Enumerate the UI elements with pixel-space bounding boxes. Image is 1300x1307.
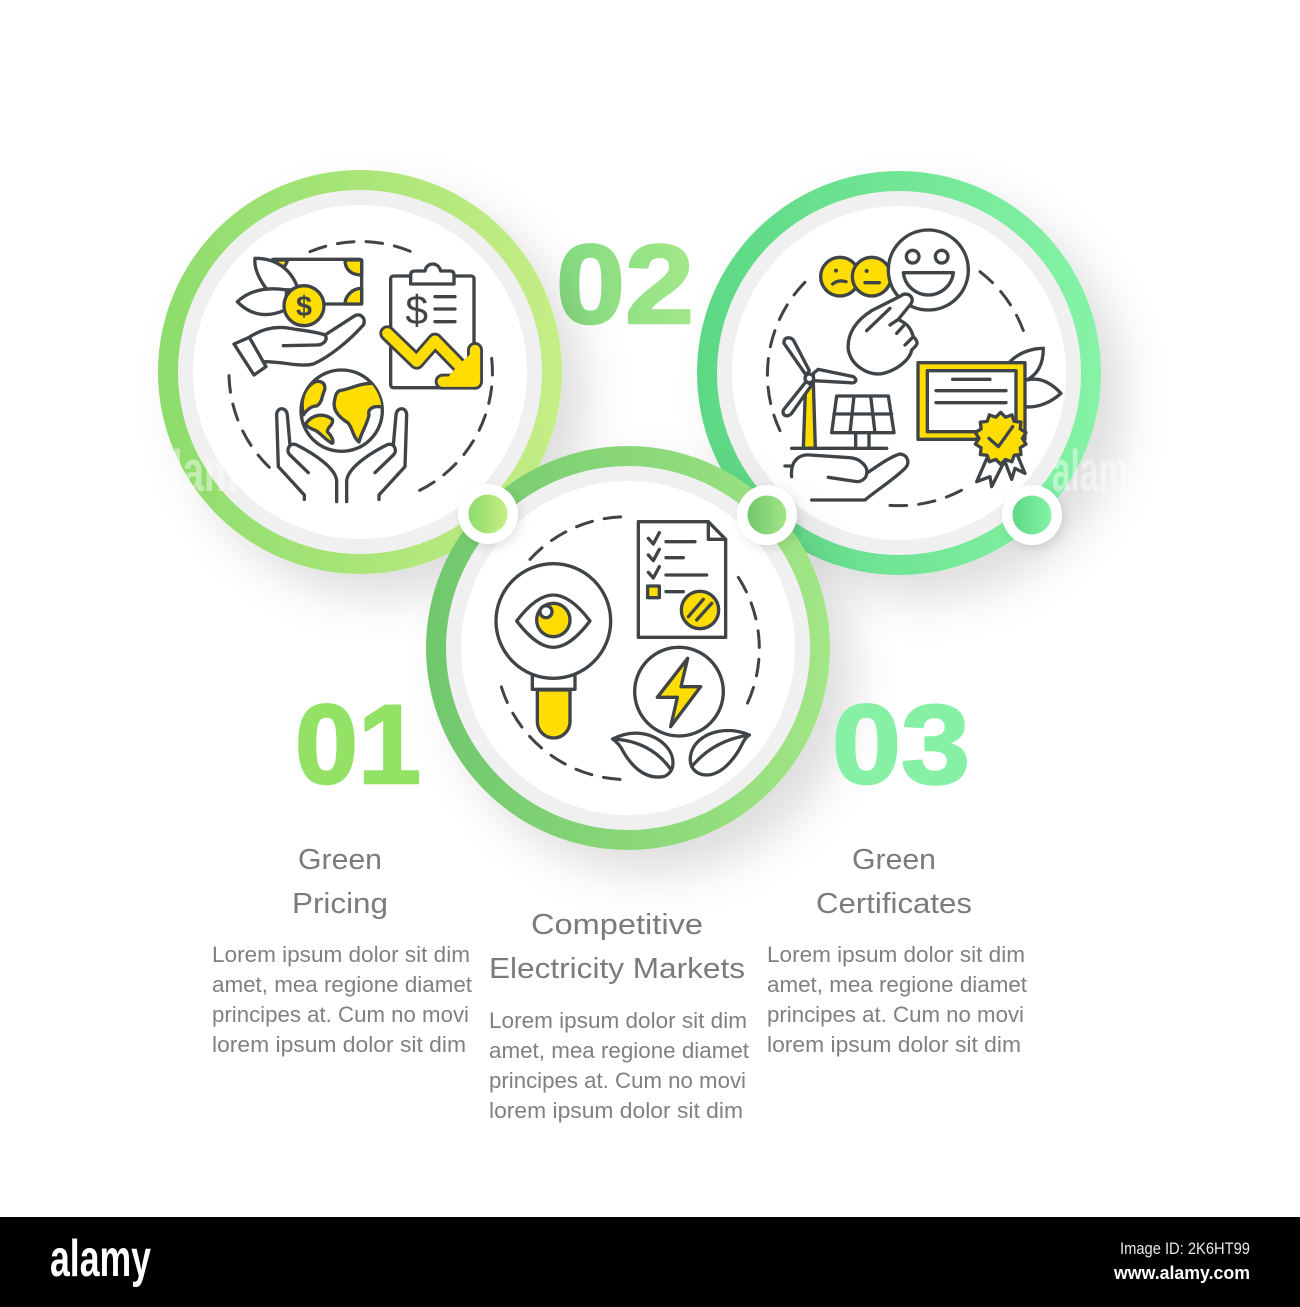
icon: green pricing: $ (296, 291, 312, 323)
text block: competitive electricity markets: lorem ipsum dolor sit dim (489, 1098, 743, 1123)
text block: green certificates (767, 844, 1027, 1057)
connector dot 3 (737, 485, 797, 545)
panel: green certificates circle (697, 171, 1128, 575)
text block: green pricing: amet, mea regione diamet (212, 972, 472, 997)
connector dot 2 (1002, 485, 1062, 545)
text block: competitive electricity markets (489, 909, 749, 1123)
text block: green certificates: amet, mea regione diamet (767, 972, 1027, 997)
number 03: 03 (832, 682, 970, 807)
panel: green pricing circle (158, 170, 562, 574)
icon: green pricing (229, 242, 492, 502)
website: www.alamy.com (1113, 1263, 1250, 1283)
text block: competitive electricity markets: amet, mea regione diamet (489, 1038, 749, 1063)
text block: green pricing (212, 844, 472, 1057)
text block: green certificates: Certificates (816, 888, 972, 920)
text block: competitive electricity markets: Lorem ipsum dolor sit dim (489, 1008, 747, 1033)
text block: green pricing: lorem ipsum dolor sit dim (212, 1032, 466, 1057)
icon: green pricing: $ (405, 287, 428, 333)
logo: alamy: alamy (50, 1230, 151, 1288)
panel: competitive electricity markets circle (426, 446, 830, 850)
text block: competitive electricity markets: principes at. Cum no movi (489, 1068, 746, 1093)
connector dot 1 (458, 484, 518, 544)
text block: green certificates: lorem ipsum dolor sit dim (767, 1032, 1021, 1057)
text block: competitive electricity markets: Competitive (531, 909, 703, 941)
number 01: 01 (295, 682, 421, 807)
text block: green certificates: Lorem ipsum dolor sit dim (767, 942, 1025, 967)
icon: green certificates (767, 230, 1061, 506)
watermark band (0, 1217, 1300, 1307)
text block: competitive electricity markets: Electricity Markets (489, 953, 745, 985)
watermark fragment right: alam (1052, 439, 1128, 504)
text block: green pricing: Pricing (292, 888, 388, 920)
watermark fragment left: lam (172, 439, 238, 504)
text block: green pricing: Lorem ipsum dolor sit dim (212, 942, 470, 967)
text block: green pricing: principes at. Cum no movi (212, 1002, 469, 1027)
number 02: 02 (556, 222, 694, 347)
icon: competitive electricity markets (496, 517, 759, 779)
text block: green certificates: Green (852, 844, 936, 876)
text block: green certificates: principes at. Cum no movi (767, 1002, 1024, 1027)
text block: green pricing: Green (298, 844, 382, 876)
image id: Image ID: 2K6HT99 (1120, 1239, 1250, 1258)
